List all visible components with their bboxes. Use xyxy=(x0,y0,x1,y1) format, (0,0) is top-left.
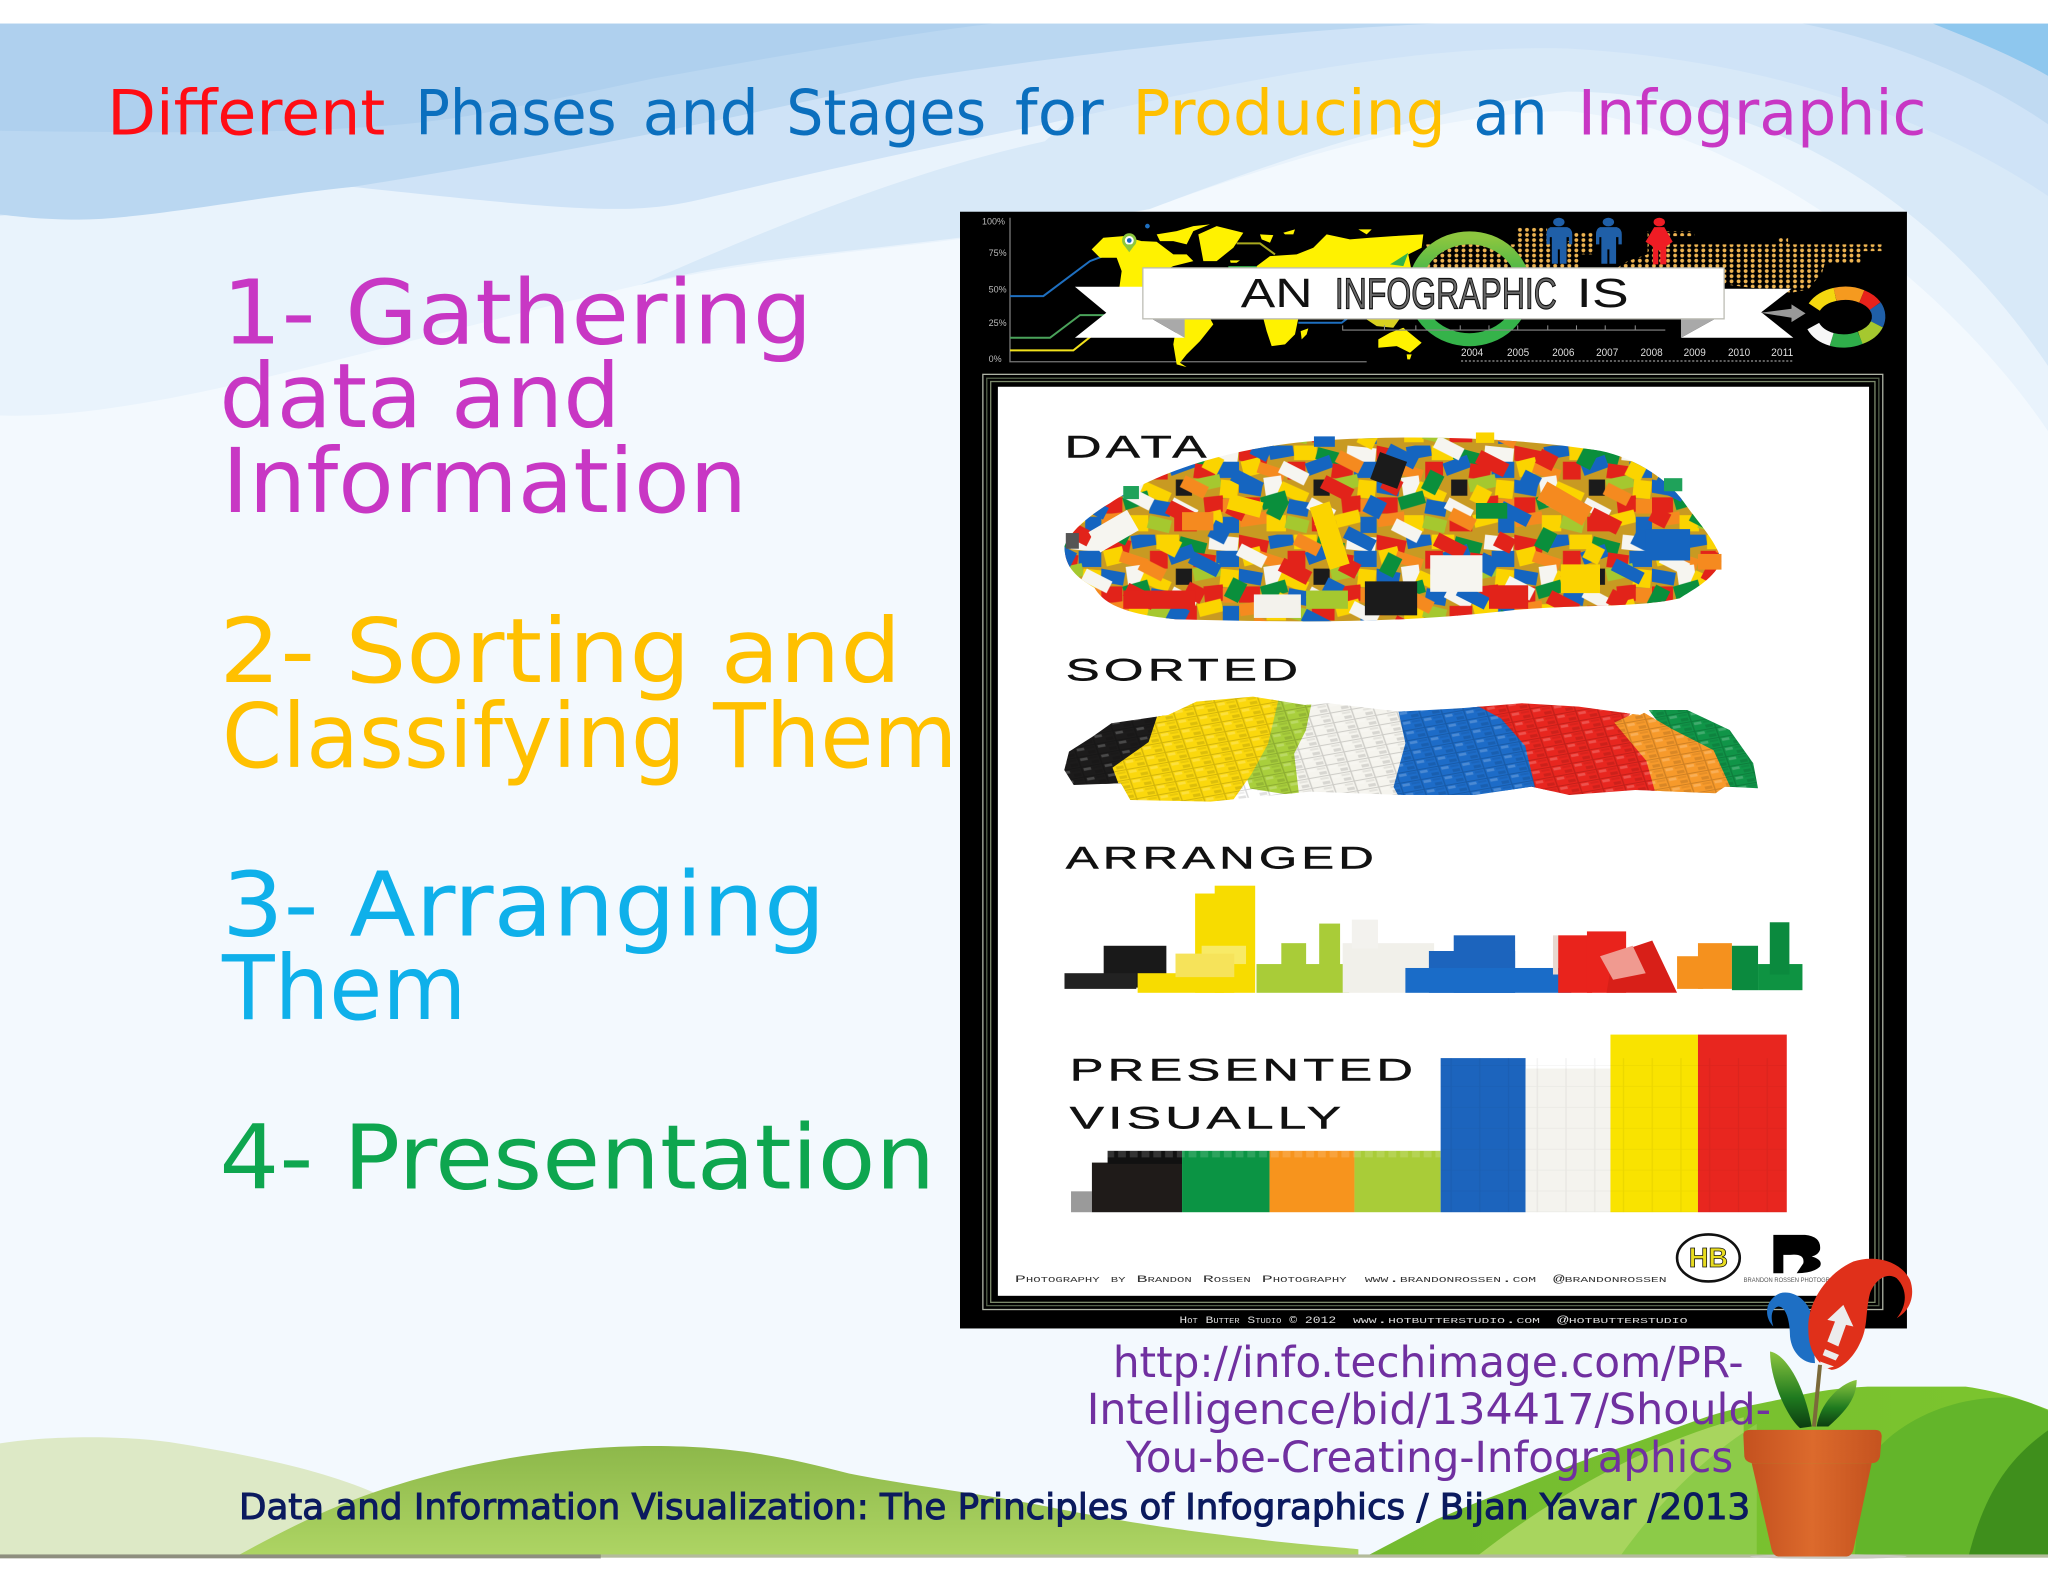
poster header: year axis: 2006 xyxy=(1552,347,1574,359)
poster white panel xyxy=(998,387,1869,1296)
label: presented visually: VISUALLY xyxy=(1070,1101,1345,1136)
label: data: DATA xyxy=(1064,429,1211,464)
poster header: ribbon banner: AN xyxy=(1241,270,1313,316)
photography credit: Photography by Brandon Rossen Photography xyxy=(1015,1274,1348,1286)
icon: potted plant with arrow flower xyxy=(1743,1259,1912,1559)
poster header: year axis: 2007 xyxy=(1596,347,1618,359)
poster header: year axis: 2005 xyxy=(1507,347,1529,359)
poster header: year axis: 2008 xyxy=(1640,347,1663,359)
footer credit: Data and Information Visualization: The Principles of Infographics / Bijan Yavar /2013 xyxy=(239,1487,1750,1528)
panel: an infographic is poster xyxy=(960,212,1907,1328)
step 3 text: 3- Arranging xyxy=(222,853,825,956)
poster header: chart axis and lines xyxy=(982,216,1367,364)
studio credit xyxy=(1179,1315,1688,1327)
poster header: green ring xyxy=(1415,238,1524,340)
lego bar chart xyxy=(1071,1035,1787,1212)
poster header: ribbon banner: IS xyxy=(1576,270,1629,316)
label: presented visually: PRESENTED xyxy=(1070,1052,1417,1087)
studio credit: Hot Butter Studio © 2012 xyxy=(1179,1315,1336,1327)
title: Different xyxy=(107,77,385,150)
studio credit: @hotbutterstudio xyxy=(1557,1315,1688,1327)
source url xyxy=(1087,1338,1771,1483)
source url: http://info.techimage.com/PR- xyxy=(1113,1338,1744,1388)
poster header: year axis xyxy=(1461,347,1793,361)
poster header: ribbon banner: INFOGRAPHIC xyxy=(1335,270,1557,318)
source url: You-be-Creating-Infographics xyxy=(1125,1433,1733,1483)
title: Producing xyxy=(1132,77,1446,150)
step 1 text xyxy=(219,262,812,533)
logo: brandon rossen: BRANDON ROSSEN PHOTOGR xyxy=(1744,1277,1830,1284)
poster header: map pin xyxy=(1122,224,1150,252)
lego pile: unsorted data xyxy=(1058,431,1731,627)
step 3 text xyxy=(221,853,825,1040)
poster header: small year ticks xyxy=(1343,325,1665,330)
title: and xyxy=(643,77,759,150)
label: sorted: SORTED xyxy=(1066,653,1302,688)
poster header: chart axis and lines: 100% xyxy=(982,216,1005,226)
label: arranged: ARRANGED xyxy=(1066,841,1378,876)
lego stacks: arranged by colour xyxy=(1064,886,1802,993)
poster header: year axis: 2011 xyxy=(1771,347,1793,359)
source url: Intelligence/bid/134417/Should- xyxy=(1087,1385,1771,1435)
title xyxy=(107,77,1927,150)
title: Infographic xyxy=(1578,77,1927,150)
step 1 text: data and xyxy=(219,345,620,448)
step 2 text xyxy=(219,600,957,788)
title: Stages xyxy=(786,77,986,150)
photography credit: @brandonrossen xyxy=(1553,1274,1667,1286)
logo: hot butter xyxy=(1677,1234,1740,1281)
title: for xyxy=(1015,77,1104,150)
logo: brandon rossen xyxy=(1744,1235,1830,1284)
step 1 text: Information xyxy=(222,430,747,533)
poster header: people icons xyxy=(1546,218,1673,264)
title: Phases xyxy=(415,77,616,150)
studio credit: www.hotbutterstudio.com xyxy=(1353,1315,1540,1327)
poster frame xyxy=(983,374,1883,1310)
step 2 text: 2- Sorting and xyxy=(219,600,901,703)
poster header: chart axis and lines: 75% xyxy=(989,248,1007,258)
step 1 text: 1- Gathering xyxy=(222,262,812,365)
step 3 text: Them xyxy=(221,937,466,1040)
title: an xyxy=(1473,77,1548,150)
poster header: arrow xyxy=(1761,304,1806,322)
lego pile: sorted by colour xyxy=(1050,693,1767,807)
poster header: year axis: 2010 xyxy=(1728,347,1750,359)
poster header: chart axis and lines: 50% xyxy=(989,285,1007,295)
photography credit: www.brandonrossen.com xyxy=(1365,1274,1536,1286)
hills xyxy=(0,1387,2048,1558)
poster header: dotted map xyxy=(1423,228,1882,292)
step 4 text: 4- Presentation xyxy=(219,1107,935,1210)
photography credit xyxy=(1015,1274,1667,1286)
poster header: chart axis and lines: 25% xyxy=(989,318,1007,328)
poster header: chart axis and lines: 0% xyxy=(989,354,1002,364)
poster header: world map xyxy=(1092,224,1423,367)
label: presented visually xyxy=(1070,1052,1417,1136)
poster header: year axis: 2004 xyxy=(1461,347,1483,359)
poster header: donut chart xyxy=(1813,293,1879,341)
logo: hot butter: HB xyxy=(1689,1242,1728,1273)
poster header: year axis: 2009 xyxy=(1684,347,1706,359)
poster header: ribbon banner xyxy=(1075,268,1793,338)
step 2 text: Classifying Them xyxy=(222,685,957,788)
